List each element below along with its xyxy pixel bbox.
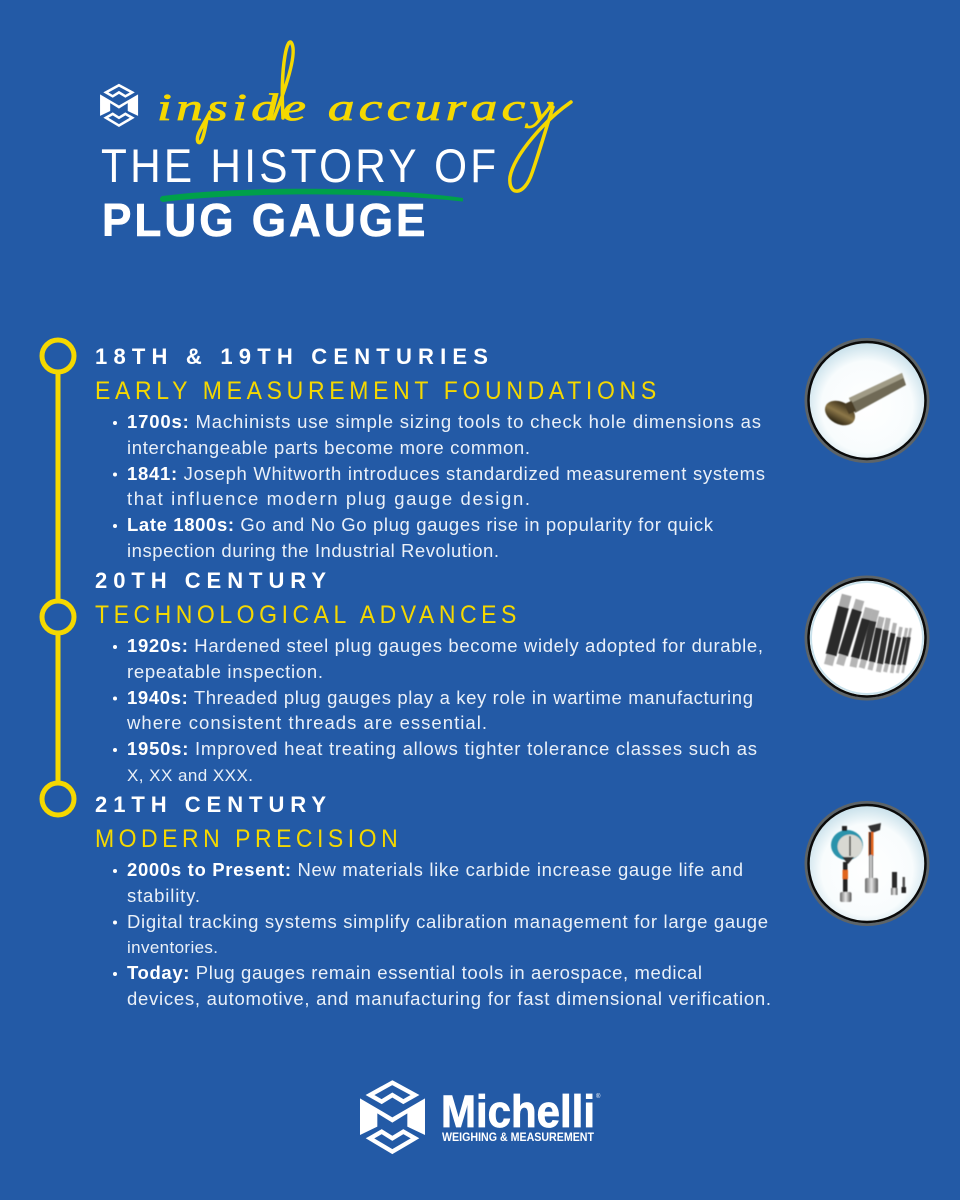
section heading: 18TH & 19TH CENTURIES: [95, 344, 488, 369]
icon: plug gauge set photo: [806, 577, 928, 699]
icon: Michelli mark: [360, 1083, 425, 1152]
section subheading: MODERN PRECISION: [95, 825, 398, 853]
timeline marker 3: [42, 783, 74, 815]
timeline marker 1: [42, 340, 74, 372]
bullet list: 1841: Joseph Whitworth introduces standardized measurement systems: [127, 463, 765, 484]
bullet list: repeatable inspection.: [127, 661, 323, 682]
timeline marker 2: [42, 601, 74, 633]
bullet list: stability.: [127, 885, 200, 906]
panel: 18th and 19th centuries: [95, 344, 765, 561]
heading: plug gauge: PLUG GAUGE: [102, 194, 426, 246]
bullet list: [113, 859, 771, 1009]
bullet list: inspection during the Industrial Revolution.: [127, 540, 499, 561]
bullet list: 1950s: Improved heat treating allows tighter tolerance classes such as: [127, 738, 757, 759]
bullet list: inventories.: [127, 938, 218, 957]
bullet list: 1920s: Hardened steel plug gauges become widely adopted for durable,: [127, 635, 763, 656]
title block: [100, 42, 571, 246]
bullet list: Digital tracking systems simplify calibration management for large gauge: [127, 911, 768, 932]
bullet list: that influence modern plug gauge design.: [127, 488, 530, 509]
green underline: [160, 189, 463, 202]
bullet list: Late 1800s: Go and No Go plug gauges rise in popularity for quick: [127, 514, 714, 535]
bullet list: 2000s to Present: New materials like carbide increase gauge life and: [127, 859, 743, 880]
icon: bore gauges photo: [806, 802, 928, 924]
script heading: inside accuracy: inside accuracy: [157, 86, 554, 128]
icon: small Michelli mark: [100, 85, 138, 126]
wordmark: Michelli: [441, 1086, 595, 1137]
panel: 21th century: [95, 792, 771, 1009]
tagline: WEIGHING & MEASUREMENT: [442, 1132, 594, 1144]
bullet list: 1700s: Machinists use simple sizing tools to check hole dimensions as: [127, 411, 761, 432]
bullet list: [113, 411, 765, 561]
bullet list: 1940s: Threaded plug gauges play a key role in wartime manufacturing: [127, 687, 753, 708]
section heading: 21TH CENTURY: [95, 792, 326, 817]
section subheading: TECHNOLOGICAL ADVANCES: [95, 601, 516, 629]
bullet list: devices, automotive, and manufacturing for fast dimensional verification.: [127, 988, 771, 1009]
icon: single plug gauge photo: [806, 340, 928, 462]
bullet list: where consistent threads are essential.: [126, 712, 487, 733]
script heading: inside accuracy: [157, 42, 571, 191]
bullet list: [113, 635, 763, 785]
heading: the history of: THE HISTORY OF: [101, 141, 496, 193]
logo: Michelli Weighing and Measurement: ®: [596, 1093, 601, 1100]
bullet list: Today: Plug gauges remain essential tools in aerospace, medical: [127, 962, 702, 983]
section subheading: EARLY MEASUREMENT FOUNDATIONS: [95, 377, 656, 405]
panel: 20th century: [95, 568, 763, 785]
bullet list: interchangeable parts become more common.: [127, 437, 530, 458]
section heading: 20TH CENTURY: [95, 568, 326, 593]
timeline: [42, 340, 74, 815]
logo: Michelli Weighing and Measurement: [360, 1083, 601, 1152]
bullet list: X, XX and XXX.: [127, 766, 253, 785]
